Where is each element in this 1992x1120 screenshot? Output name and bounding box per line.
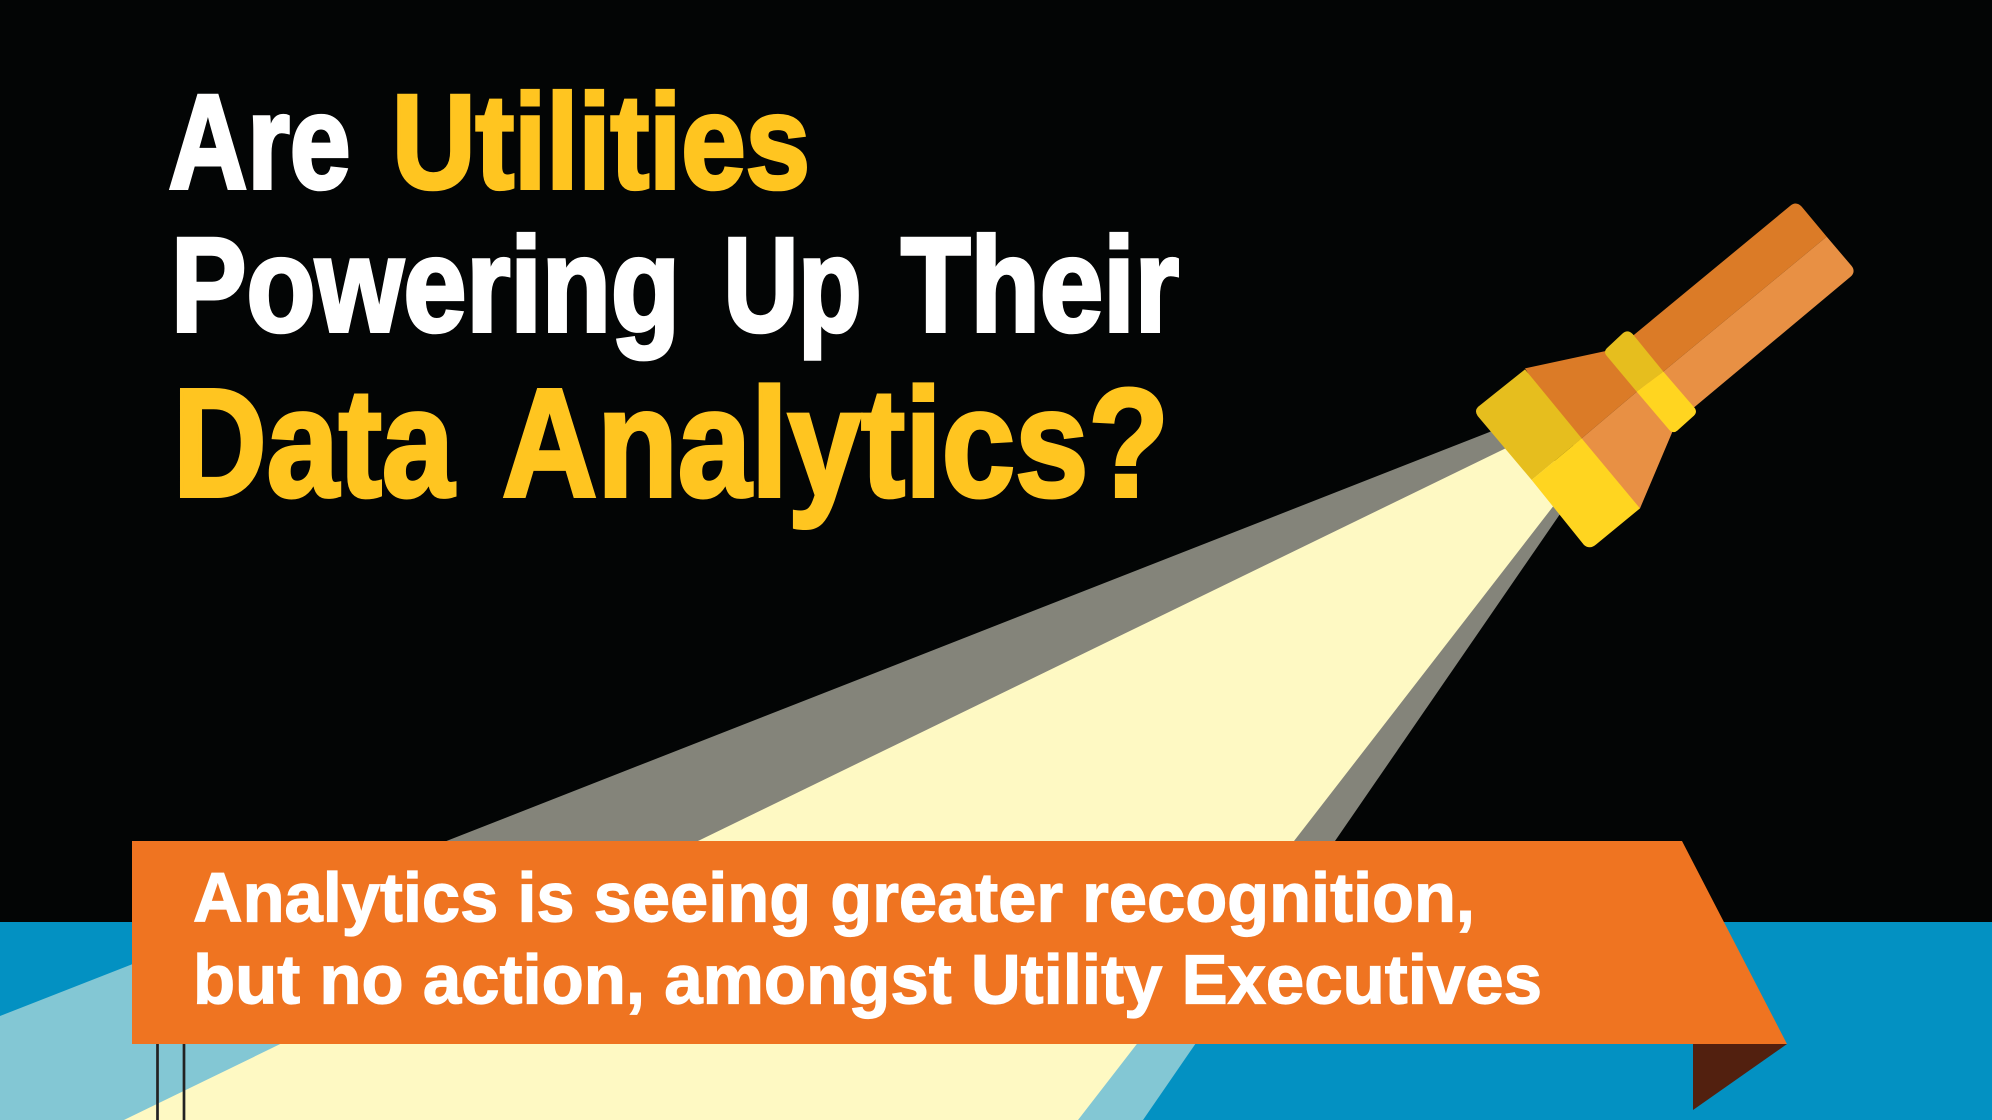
icon: flashlight bbox=[1476, 203, 1854, 547]
blue floor band bbox=[0, 922, 1992, 1120]
title line 3 bbox=[173, 357, 1169, 529]
title line 1 bbox=[168, 68, 810, 217]
inner light beam bbox=[124, 435, 1572, 1120]
title line 2: Up bbox=[724, 211, 862, 360]
title line 3: Data bbox=[173, 357, 455, 529]
title bbox=[168, 68, 1179, 529]
ribbon fold bbox=[1693, 1044, 1787, 1110]
subtitle line 1: Analytics is seeing greater recognition, bbox=[193, 858, 1475, 936]
outer light beam bbox=[0, 424, 1580, 1120]
subtitle bbox=[193, 858, 1542, 1018]
title line 3: Analytics? bbox=[502, 357, 1169, 529]
title line 2: Their bbox=[901, 211, 1179, 360]
title line 1: Are bbox=[168, 68, 350, 217]
stand lines bbox=[158, 1040, 184, 1120]
subtitle line 2: but no action, amongst Utility Executives bbox=[193, 940, 1542, 1018]
title line 1: Utilities bbox=[392, 68, 810, 217]
title line 2: Powering bbox=[171, 211, 680, 360]
title line 2 bbox=[171, 211, 1179, 360]
banner bbox=[132, 841, 1787, 1044]
